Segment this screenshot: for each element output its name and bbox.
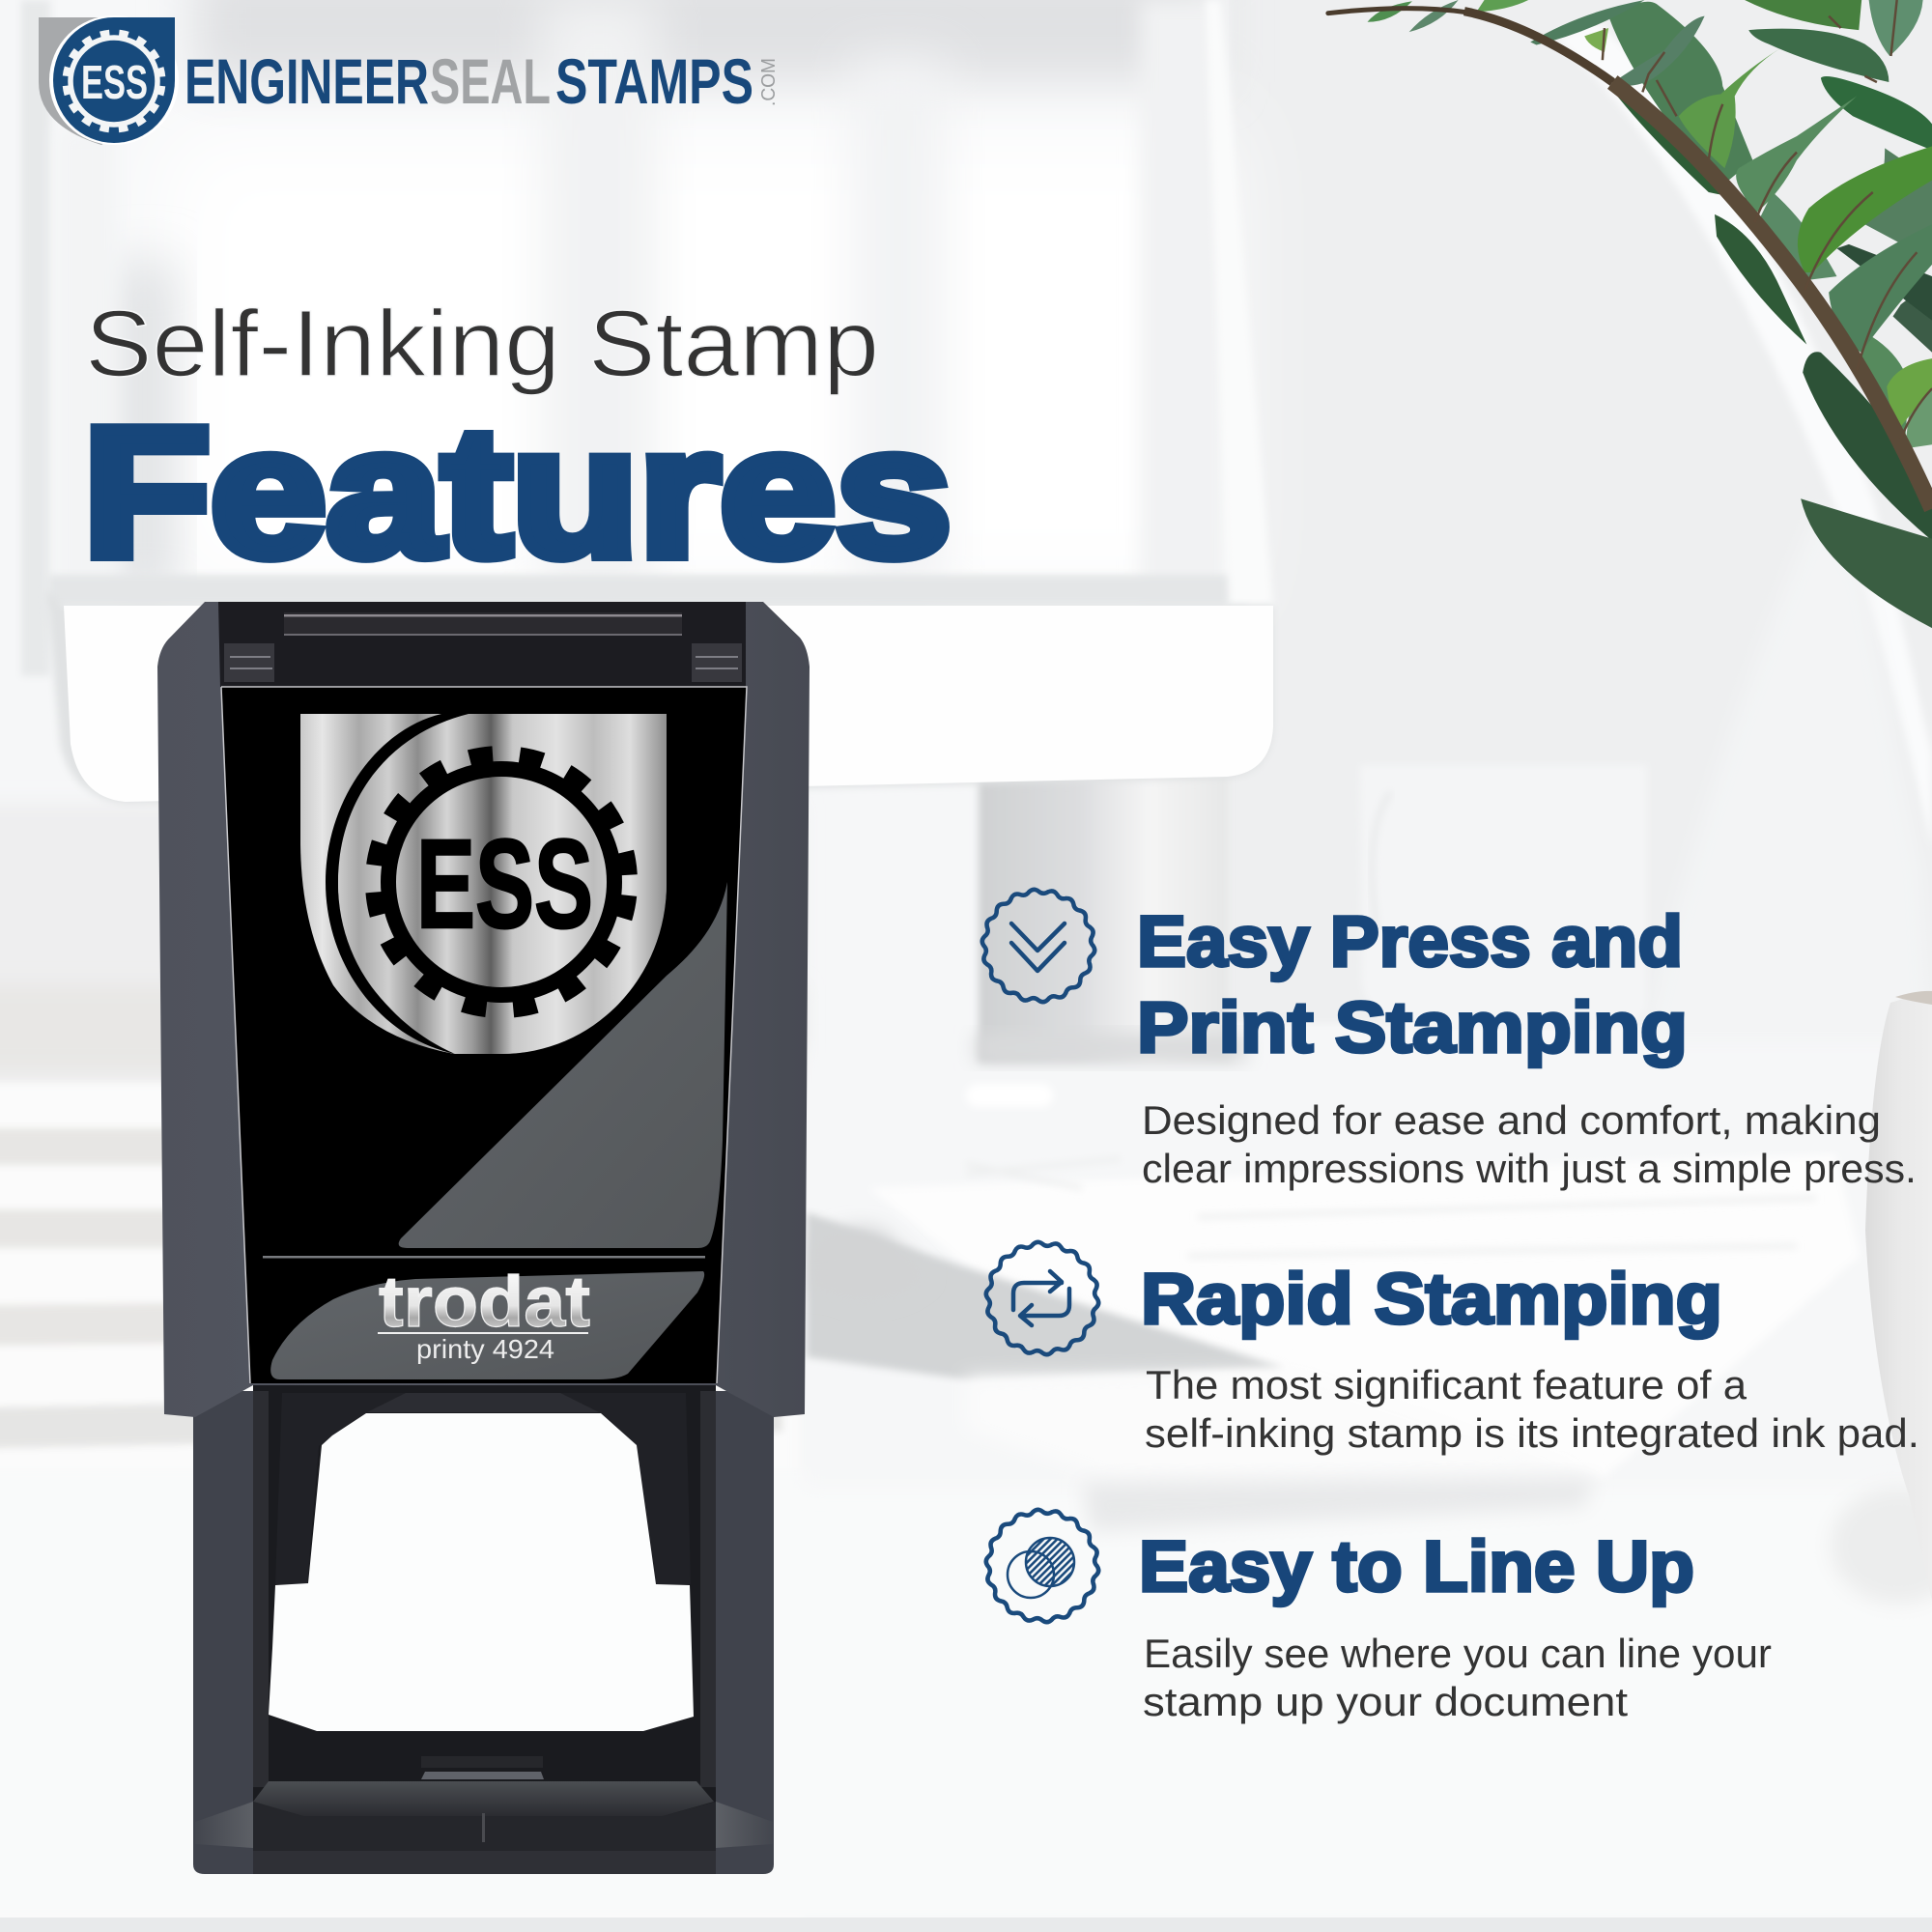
title line: Self-Inking Stamp: Self-Inking Stamp: [85, 291, 879, 396]
stamp product: [157, 602, 810, 1874]
base front: [253, 1802, 716, 1874]
feature 1 text: [1142, 1097, 1917, 1191]
monitor frame side highlight: [1206, 0, 1273, 606]
logo wordmark: SEAL: [430, 45, 551, 117]
trodat badge: printy 4924: [416, 1334, 554, 1364]
base bevels: [195, 1802, 253, 1848]
upper leaves: [1748, 29, 1889, 82]
twigs: [1603, 0, 1932, 439]
monitor stand: [979, 773, 1230, 1063]
logo shield: [39, 15, 179, 145]
frame opening: [269, 1413, 694, 1731]
logo wordmark: [185, 45, 780, 117]
logo wordmark: .COM: [758, 58, 780, 106]
black glossy panel: [221, 687, 747, 1383]
feature 2 heading: Rapid Stamping: [1141, 1259, 1722, 1339]
title line: Features: Features: [83, 390, 952, 595]
right desk: [802, 1048, 1932, 1488]
logo wordmark: STAMPS: [555, 45, 753, 117]
plant: [1328, 0, 1932, 628]
logo: [39, 15, 780, 145]
top small leaves: [1368, 1, 1412, 22]
trodat badge: [263, 1256, 705, 1379]
feature 1 text: Designed for ease and comfort, making: [1142, 1097, 1881, 1143]
feature 1 text: clear impressions with just a simple press.: [1142, 1146, 1917, 1191]
lower frame: [193, 1383, 774, 1874]
dark back leaves: [1612, 90, 1748, 200]
feature 3 heading: Easy to Line Up: [1139, 1526, 1694, 1606]
gear: [388, 769, 614, 995]
feature 3 text: stamp up your document: [1143, 1679, 1628, 1724]
feature 3 text: Easily see where you can line your: [1144, 1631, 1772, 1676]
feature 2 text: self-inking stamp is its integrated ink pad.: [1145, 1410, 1919, 1456]
mug: [1360, 765, 1647, 1029]
white monitor chin: [46, 589, 1273, 804]
mid leaves: [1679, 48, 1780, 168]
feature 2 text: The most significant feature of a: [1146, 1362, 1747, 1407]
engraved shield emblem: [300, 714, 667, 1054]
trodat badge: trodat: [379, 1262, 590, 1342]
feature 3 text: [1143, 1631, 1772, 1724]
monitor screen glow: [58, 0, 1229, 606]
keyboard: [869, 1154, 1860, 1478]
inner arms: [275, 1393, 691, 1584]
left desk area and stripes: [0, 804, 802, 1084]
stem: [1328, 9, 1612, 80]
curved white wall edge: [1555, 19, 1932, 850]
feature 3 icon: overlapping circles: [983, 1507, 1101, 1625]
wall right: [1229, 0, 1932, 1024]
feature 2 icon: repeat arrows: [983, 1239, 1101, 1357]
logo letters: ESS: [81, 57, 148, 109]
feature 1 heading: Easy Press and: [1137, 901, 1683, 981]
feature 2 text: [1145, 1362, 1919, 1456]
emblem letters: ESS: [416, 812, 593, 954]
feature 1 heading: Print Stamping: [1137, 987, 1688, 1067]
logo wordmark: ENGINEER: [185, 45, 429, 117]
tray: [253, 1781, 714, 1816]
large back leaves: [1608, 2, 1752, 181]
pot: [1831, 1488, 1932, 1604]
panel reflection: [399, 882, 727, 1248]
feature 1 icon: chevrons: [980, 887, 1097, 1005]
feature 1 heading: [1137, 901, 1688, 1067]
clear top cap: [218, 602, 746, 688]
silver disc: [338, 714, 667, 1054]
upper housing: [157, 602, 810, 1417]
